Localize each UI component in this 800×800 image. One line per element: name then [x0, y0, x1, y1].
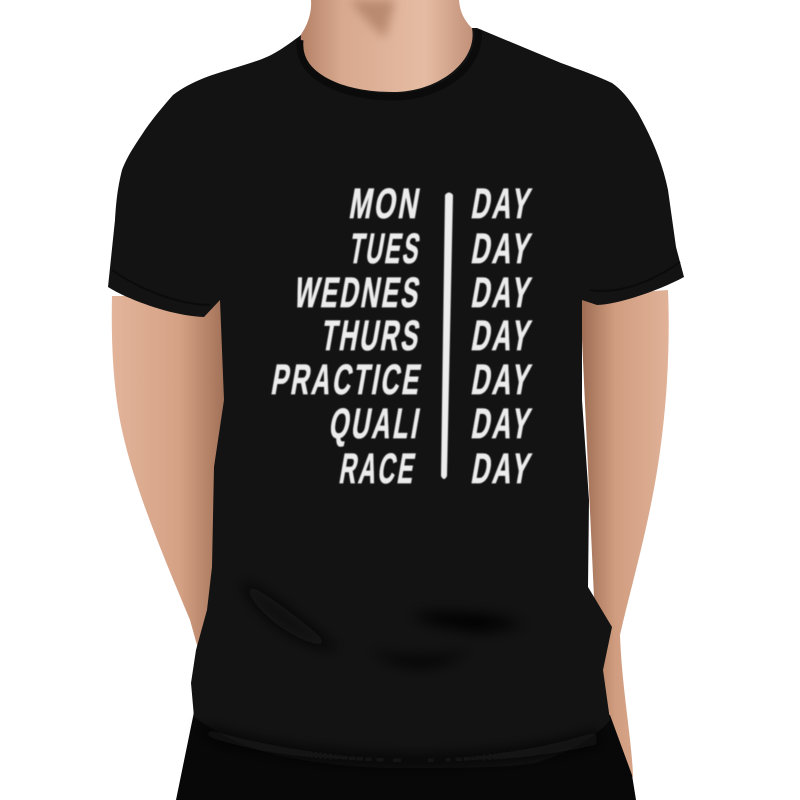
fabric folds: [200, 580, 600, 765]
left arm: [112, 296, 226, 670]
left column words: PRACTICE: [268, 356, 427, 404]
right column words: DAY: [468, 312, 537, 360]
left column words: [268, 180, 427, 493]
left column words: THURS: [318, 312, 426, 360]
left column words: WEDNES: [291, 269, 426, 317]
right column words: DAY: [468, 356, 537, 404]
left column words: TUES: [346, 225, 426, 273]
neck: [296, 0, 480, 110]
right column words: DAY: [468, 400, 537, 448]
right column words: [468, 180, 537, 493]
right column words: DAY: [468, 269, 537, 317]
divider bar: [441, 192, 453, 479]
trousers: [176, 712, 636, 800]
t-shirt: [108, 28, 684, 768]
right column words: DAY: [468, 180, 537, 228]
left column words: RACE: [336, 445, 421, 493]
right column words: DAY: [468, 225, 537, 273]
right arm and hand: [580, 290, 669, 777]
printed text: [268, 180, 537, 493]
left column words: MON: [346, 180, 426, 228]
collar: [300, 30, 478, 97]
shirt body: [108, 28, 684, 768]
right column words: DAY: [468, 445, 537, 493]
left column words: QUALI: [326, 400, 426, 448]
sleeve hem folds: [112, 262, 680, 305]
